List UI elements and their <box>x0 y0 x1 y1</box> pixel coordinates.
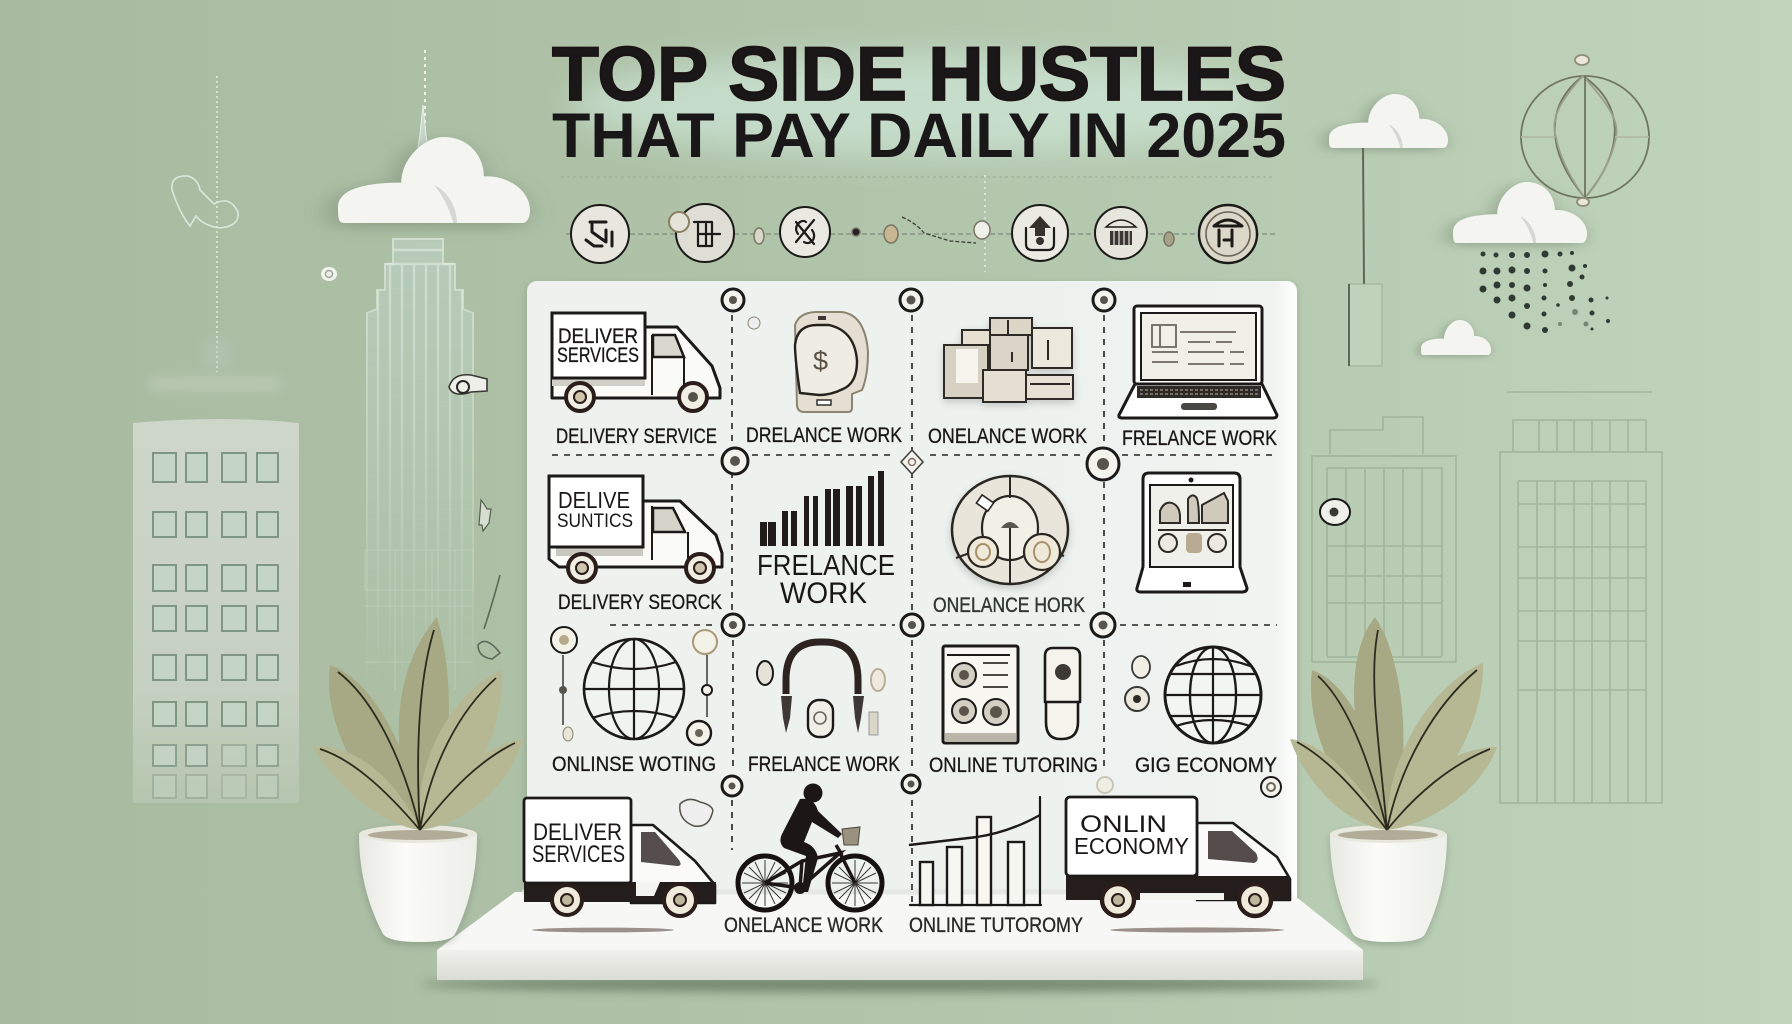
grid nodes <box>722 289 1281 797</box>
icon: phone device with dollar: $ <box>813 346 828 376</box>
label: delivery storck: DELIVERY SEORCK <box>558 591 722 614</box>
floating node: pin left <box>479 500 491 531</box>
rain dots <box>1480 250 1610 333</box>
truck: delivery services on platform: SERVICES <box>532 841 625 868</box>
building: ghost right large <box>1500 392 1662 803</box>
platform <box>420 892 1380 992</box>
truck: online economy on platform <box>1066 797 1290 916</box>
truck: row 2 <box>549 476 722 582</box>
floating node: eye right <box>1320 499 1350 525</box>
plant: left <box>313 617 523 830</box>
icon: phone device with dollar <box>748 312 868 412</box>
building: left solid <box>133 376 299 803</box>
label: online tutormy: ONLINE TUTOROMY <box>909 914 1083 937</box>
icon: globe with nodes <box>551 627 717 745</box>
cloud 1 <box>338 137 530 223</box>
truck: online economy on platform: ONLIN <box>1080 811 1167 838</box>
chart: bar and trend <box>909 797 1041 905</box>
floating node: left <box>321 267 337 281</box>
title: THAT PAY DAILY IN 2025 <box>552 101 1286 171</box>
cloud 2 <box>1329 94 1448 148</box>
grid dividers <box>552 315 1277 905</box>
label: drelance work: DRELANCE WORK <box>746 424 902 447</box>
small node near truck <box>680 799 713 826</box>
icon: laptop <box>1119 306 1277 418</box>
truck: row 1: DELIVER <box>558 325 638 348</box>
icon: top circle 6 <box>1199 205 1257 263</box>
chart: bars with frelance work: FRELANCE <box>757 550 895 582</box>
cloud 4 <box>1421 320 1491 355</box>
icon: top circle 4 <box>1012 205 1068 261</box>
label: gig economy: GIG ECONOMY <box>1135 754 1277 777</box>
icon: top circle 2 <box>669 204 734 262</box>
pot: left <box>359 825 477 942</box>
left background dotted line and glass outline <box>172 76 238 372</box>
truck: row 2: DELIVE <box>558 487 630 513</box>
building: ghost skyscraper <box>365 50 473 690</box>
panel: main board <box>527 281 1297 921</box>
title glow <box>570 55 1270 155</box>
building: ghost right small <box>1312 417 1456 662</box>
platform smudges <box>532 927 1284 933</box>
title: TOP SIDE HUSTLES <box>552 32 1286 117</box>
icon: tablet <box>1137 473 1247 592</box>
icon: top circle 5 <box>1095 207 1147 259</box>
wire globe <box>1521 55 1649 206</box>
icon: tutoring card and device <box>943 646 1080 743</box>
label: online tutoring: ONLINE TUTORING <box>929 754 1098 777</box>
label: onelance hork: ONELANCE HORK <box>933 594 1085 617</box>
icon: stacked boxes <box>944 318 1073 402</box>
icon: top circle 1 <box>571 205 629 263</box>
floating node: eye left <box>449 375 487 394</box>
title <box>552 32 1286 171</box>
subtitle rule <box>561 175 1275 272</box>
floating node: curl left <box>478 575 500 659</box>
label: online voting: ONLINSE WOTING <box>552 753 716 776</box>
plant: right <box>1290 617 1497 830</box>
label: delivery service: DELIVERY SERVICE <box>556 425 717 448</box>
icon: cyclist <box>738 784 882 910</box>
chart: bars with frelance work: WORK <box>780 577 867 610</box>
label: frelance work 2: FRELANCE WORK <box>748 753 900 776</box>
truck: row 1: SERVICES <box>557 344 639 367</box>
icon: headphones <box>757 642 885 737</box>
icon: top circle 3 <box>780 207 830 257</box>
cloud 3 <box>1453 182 1587 243</box>
chart: bars with frelance work <box>757 471 895 610</box>
pot: right <box>1330 825 1447 942</box>
truck: online economy on platform: ECONOMY <box>1074 833 1189 859</box>
top icon row <box>566 204 1275 263</box>
truck: delivery services on platform: DELIVER <box>533 819 622 846</box>
truck: row 1 <box>552 313 720 411</box>
icon: segmented wheel <box>952 476 1068 584</box>
pole and frame under cloud <box>1349 148 1382 366</box>
label: onelance work: ONELANCE WORK <box>928 425 1087 448</box>
label: frelance work: FRELANCE WORK <box>1122 427 1277 450</box>
small connector nodes <box>754 221 1174 246</box>
truck: delivery services on platform <box>524 798 716 916</box>
label: onelance work 2: ONELANCE WORK <box>724 914 883 937</box>
icon: globe gig economy <box>1125 647 1261 743</box>
truck: row 2: SUNTICS <box>557 511 633 532</box>
